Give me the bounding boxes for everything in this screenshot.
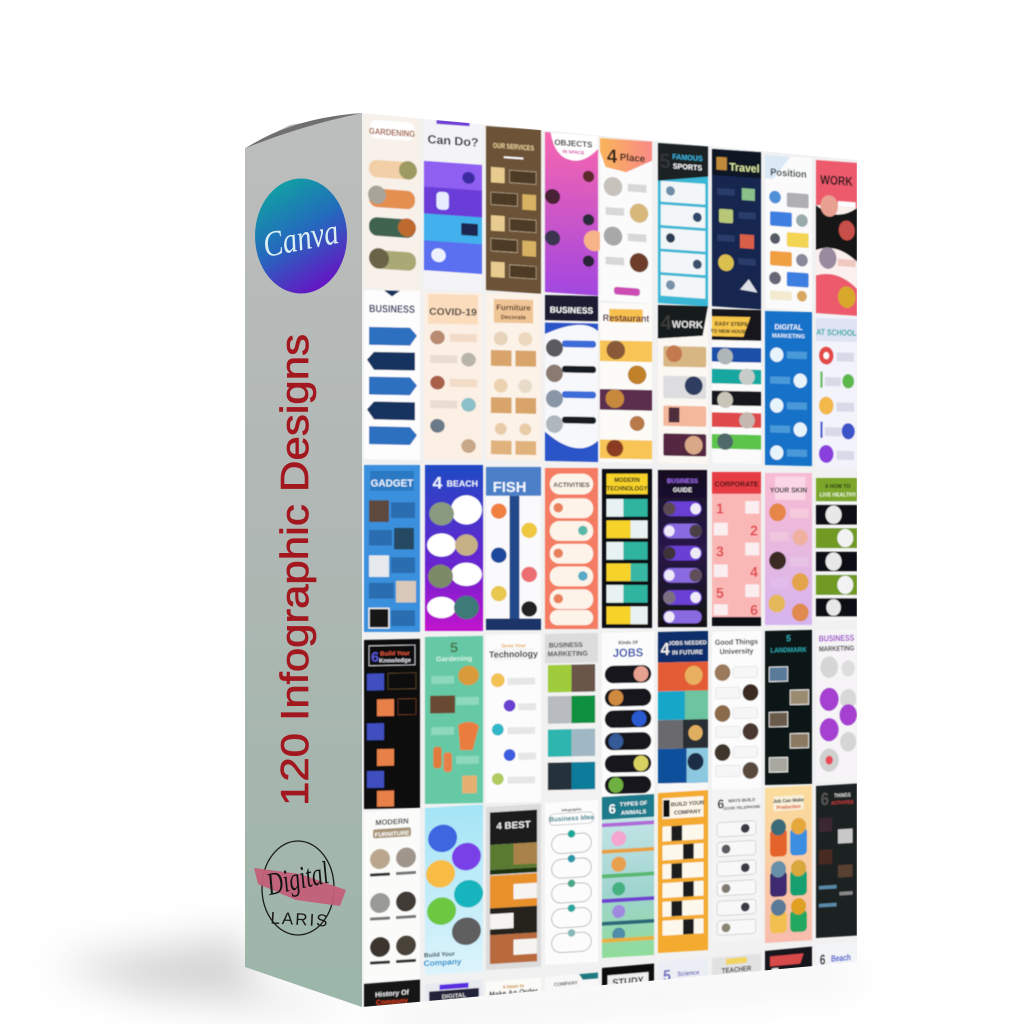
- thumbnail: 4 Beach: BEACH: [447, 479, 478, 488]
- thumbnail: Teacher: TEACHER: [722, 965, 752, 975]
- thumbnail: Gardening mint: 5: [450, 639, 458, 655]
- thumbnail: Build Your Company orange: [658, 790, 708, 953]
- thumbnail: Gadget: GADGET: [371, 479, 413, 490]
- thumbnail: 6 Types of Animals: TYPES OF: [620, 801, 648, 808]
- thumbnail: Covid-19: COVID-19: [429, 307, 477, 319]
- thumbnail: Make An Order: [486, 978, 541, 1024]
- thumbnail: Digital Marketing: MARKETING: [772, 333, 806, 340]
- thumbnail: Landmark: [765, 630, 812, 785]
- thumbnail: Kinds of Fish: FISH: [493, 480, 526, 496]
- box left side panel: [245, 113, 362, 1007]
- thumbnail: Activities: ACTIVITIES: [553, 482, 590, 489]
- thumbnail: 6 Beach: [816, 942, 857, 1005]
- thumbnail: Make An Order: Make An Order: [489, 988, 538, 999]
- thumbnail: Business Guide: BUSINESS: [667, 478, 698, 485]
- thumbnail: Corporate: 6: [750, 603, 758, 619]
- thumbnail: Study: STUDY: [612, 975, 644, 989]
- thumbnail: Business Idea: [545, 800, 598, 965]
- thumbnail: Jobs: Kinds Of: [618, 640, 638, 646]
- thumbnail: At School: AT SCHOOL: [816, 327, 857, 338]
- thumbnail: Job Can Make Production: [765, 785, 812, 943]
- thumbnail: 6 Beach: 6: [820, 952, 826, 968]
- thumbnail: 4 Place: 4: [607, 145, 618, 167]
- thumbnail: Business Marketing photos: [545, 633, 598, 800]
- thumbnail: Build Your Company orange: COMPANY: [674, 809, 701, 817]
- thumbnail: 4 Types of Work: [658, 305, 708, 464]
- Canva logo badge: [255, 178, 347, 294]
- thumbnail: Digital: DIGITAL: [442, 992, 466, 1001]
- thumbnail: Jobs: [602, 632, 654, 798]
- product box mockup: [72, 113, 857, 1018]
- thumbnail: Business Guide: GUIDE: [673, 487, 692, 494]
- thumbnail: Good Things University: [712, 631, 761, 790]
- thumbnail: Jobs: JOBS: [613, 647, 644, 660]
- thumbnail: 4 Jobs Needed in Future: 4: [661, 639, 670, 659]
- thumbnail: Gadget: [364, 465, 420, 632]
- thumbnail: Objects in Space: OBJECTS: [554, 138, 593, 150]
- thumbnail: Business Marketing hexagons: MARKETING: [819, 645, 854, 654]
- thumbnail: Technology: Grow Your: [501, 643, 526, 650]
- thumbnail: Build Your Knowledge: 6: [371, 649, 379, 665]
- thumbnail: Business pills: BUSINESS: [550, 305, 593, 316]
- Canva logo badge: Canva: [260, 211, 342, 265]
- thumbnail: Modern Technology: TECHNOLOGY: [607, 486, 647, 493]
- thumbnail: Modern Furniture: MODERN: [375, 816, 409, 827]
- thumbnail: Business Marketing photos: MARKETING: [548, 650, 588, 658]
- Digital Laris logo: LARIS: [270, 908, 330, 931]
- thumbnail: Activities: [545, 468, 598, 629]
- thumbnail: Black and red: [765, 947, 812, 1011]
- thumbnail: 6 Types of Animals: ANIMALS: [621, 809, 647, 817]
- thumbnail: Technology: Technology: [489, 649, 538, 660]
- thumbnail: Can Do: [424, 119, 482, 292]
- thumbnail: Easy Steps: EASY STEPS: [715, 321, 748, 328]
- thumbnail: Make An Order: 6 Steps to: [503, 983, 524, 990]
- thumbnail: Good Things University: University: [720, 646, 753, 656]
- thumbnail: Our Services: OUR SERVICES: [493, 141, 534, 153]
- thumbnail: 4 Beach: 4: [433, 474, 443, 492]
- thumbnail: Our Services: [486, 126, 541, 294]
- thumbnail: 4 Jobs Needed in Future: [658, 631, 708, 795]
- thumbnail: Corporate: 2: [750, 523, 758, 539]
- thumbnail: Furniture Decorate: [486, 293, 541, 461]
- thumbnail: Can Do: Can Do?: [427, 132, 479, 150]
- thumbnail: Gardening: [367, 118, 418, 292]
- thumbnail: Travel: [712, 149, 761, 309]
- thumbnail: 4 Types of Work: WORK: [672, 319, 704, 331]
- thumbnail: Your Skin: [765, 473, 812, 625]
- thumbnail: History Of Company: Company: [376, 997, 408, 1007]
- thumbnail: 6 Ways: 6: [717, 797, 724, 812]
- thumbnail: Company: [545, 973, 598, 1024]
- thumbnail: Landmark: LANDMARK: [770, 647, 807, 655]
- thumbnail: 4 Place: [600, 138, 652, 304]
- thumbnail: Work: WORK: [820, 174, 853, 189]
- thumbnail: 6 Types of Animals: [602, 794, 654, 958]
- thumbnail: 6 Things: ACTIVITIES: [831, 799, 853, 806]
- thumbnail: Furniture Decorate: Furniture: [496, 303, 531, 313]
- thumbnail: 4 Types of Work: 4: [661, 312, 672, 335]
- thumbnail: How to Live Healthy: [816, 478, 857, 620]
- thumbnail: Study: [602, 964, 654, 1024]
- thumbnail: Build Your Company circles: Company: [424, 957, 462, 968]
- thumbnail: 5 Science: Science: [677, 969, 700, 978]
- thumbnail: Modern Technology: [602, 469, 652, 628]
- thumbnail: Job Can Make Production: Production: [776, 804, 801, 811]
- thumbnail: Build Your Knowledge: [364, 639, 420, 809]
- ground shadow: [50, 935, 857, 1024]
- thumbnail: At School: [816, 316, 857, 469]
- thumbnail: How to Live Healthy: 6 HOW TO: [825, 484, 851, 490]
- box front panel with infographic thumbnails: [362, 113, 857, 1024]
- thumbnail: 6 Things: 6: [821, 790, 829, 810]
- thumbnail: Position: Position: [770, 167, 807, 181]
- thumbnail: Corporate: 5: [716, 586, 724, 602]
- vertical product title: 120 Infographic Designs: [274, 334, 317, 806]
- thumbnail: Teacher: [712, 954, 761, 1018]
- thumbnail: 5 Science: [658, 958, 708, 1022]
- thumbnail: Kinds of Fish: [486, 467, 541, 630]
- Digital Laris logo: [254, 841, 346, 935]
- thumbnail: Objects in Space: IN SPACE: [562, 149, 584, 156]
- thumbnail: 6 Ways: WAYS BUILD: [728, 797, 755, 804]
- thumbnail: Easy Steps: TO NEW HOUSE: [711, 328, 749, 335]
- thumbnail: Modern Furniture: FURNITURE: [375, 831, 409, 839]
- thumbnail: Build Your Company orange: BUILD YOUR: [671, 800, 704, 808]
- thumbnail: 6 Beach: Beach: [831, 952, 851, 964]
- thumbnail: Build Your Company circles: Build Your: [424, 952, 456, 959]
- thumbnail: Business Idea: Infographic: [561, 807, 582, 813]
- thumbnail: Company: COMPANY: [554, 980, 578, 988]
- thumbnail: Technology: [486, 634, 541, 803]
- thumbnail: How to Live Healthy: LIVE HEALTHY: [820, 492, 857, 498]
- thumbnail: 5 Famous Sports: 5: [660, 150, 671, 173]
- thumbnail: Build Your Knowledge: Knowledge: [379, 658, 412, 665]
- thumbnail: Business Marketing photos: BUSINESS: [549, 642, 583, 650]
- thumbnail: Build Your Company circles: [424, 805, 483, 975]
- thumbnail: Your Skin: YOUR SKIN: [770, 488, 807, 495]
- thumbnail: Travel: Travel: [729, 161, 760, 176]
- thumbnail: Build Your Knowledge: Build Your: [380, 651, 411, 658]
- thumbnail: Business Marketing hexagons: BUSINESS: [819, 633, 854, 644]
- thumbnail: 4 Place: Place: [620, 152, 646, 165]
- thumbnail: Corporate: 3: [716, 544, 724, 560]
- thumbnail: Digital Marketing: DIGITAL: [775, 322, 803, 332]
- Digital Laris logo: Digital: [263, 854, 332, 902]
- thumbnail: 4 Best: 4 BEST: [496, 819, 531, 832]
- box top shading: [246, 113, 362, 148]
- thumbnail: Gardening mint: [425, 636, 483, 804]
- thumbnail: History Of Company: [364, 980, 420, 1024]
- thumbnail: Corporate: CORPORATE: [714, 480, 759, 489]
- thumbnail: 4 Jobs Needed in Future: IN FUTURE: [672, 650, 703, 657]
- thumbnail: Furniture Decorate: Decorate: [501, 315, 527, 321]
- thumbnail: Business arrows: [364, 290, 420, 460]
- thumbnail: Job Can Make Production: Job Can Make: [773, 797, 804, 805]
- thumbnail: Position: [765, 155, 812, 311]
- thumbnail: Modern Technology: MODERN: [614, 478, 640, 484]
- thumbnail: Good Things University: Good Things: [715, 637, 758, 647]
- thumbnail: 5 Famous Sports: [658, 143, 708, 306]
- thumbnail: Gardening mint: Gardening: [436, 656, 472, 663]
- thumbnail: Covid-19: [424, 292, 482, 460]
- thumbnail: 5 Famous Sports: SPORTS: [673, 161, 702, 173]
- thumbnail: History Of Company: History Of: [375, 989, 410, 999]
- thumbnail: 4 Best: [486, 804, 541, 970]
- thumbnail: Corporate: [712, 472, 761, 626]
- thumbnail: Objects in Space: [545, 132, 605, 296]
- thumbnail: Business Marketing hexagons: [818, 634, 857, 772]
- thumbnail: Restaurant: Restaurant: [603, 313, 649, 324]
- thumbnail: Business pills: [545, 295, 598, 462]
- thumbnail: Restaurant: [600, 303, 652, 463]
- thumbnail: Business Guide: [658, 470, 707, 627]
- thumbnail: Landmark: 5: [786, 633, 791, 643]
- thumbnail: Business Idea: Business Idea: [549, 814, 594, 824]
- thumbnail: 4 Jobs Needed in Future: JOBS NEEDED: [668, 640, 707, 647]
- thumbnail: Gardening: GARDENING: [369, 126, 415, 139]
- thumbnail: Work: [816, 160, 857, 316]
- thumbnail: 6 Ways: [712, 788, 761, 943]
- thumbnail: 6 Ways: GOOD TELEPHONE: [723, 804, 761, 811]
- thumbnail: 6 Things: THINGS: [834, 792, 851, 800]
- thumbnail: Business arrows: BUSINESS: [369, 304, 415, 316]
- thumbnail: Corporate: 4: [750, 565, 758, 581]
- thumbnail: Modern Furniture: [364, 809, 420, 982]
- thumbnail: 5 Science: 5: [663, 967, 671, 986]
- thumbnail: 6 Types of Animals: 6: [609, 801, 616, 817]
- thumbnail: Digital: [425, 980, 483, 1024]
- thumbnail: Corporate: 1: [716, 501, 724, 518]
- thumbnail: Digital Marketing: [765, 311, 812, 466]
- thumbnail: 6 Things: [816, 784, 857, 938]
- thumbnail: 5 Famous Sports: FAMOUS: [672, 152, 703, 163]
- thumbnail: Easy Steps: [711, 309, 761, 464]
- thumbnail: 4 Beach: [425, 465, 483, 631]
